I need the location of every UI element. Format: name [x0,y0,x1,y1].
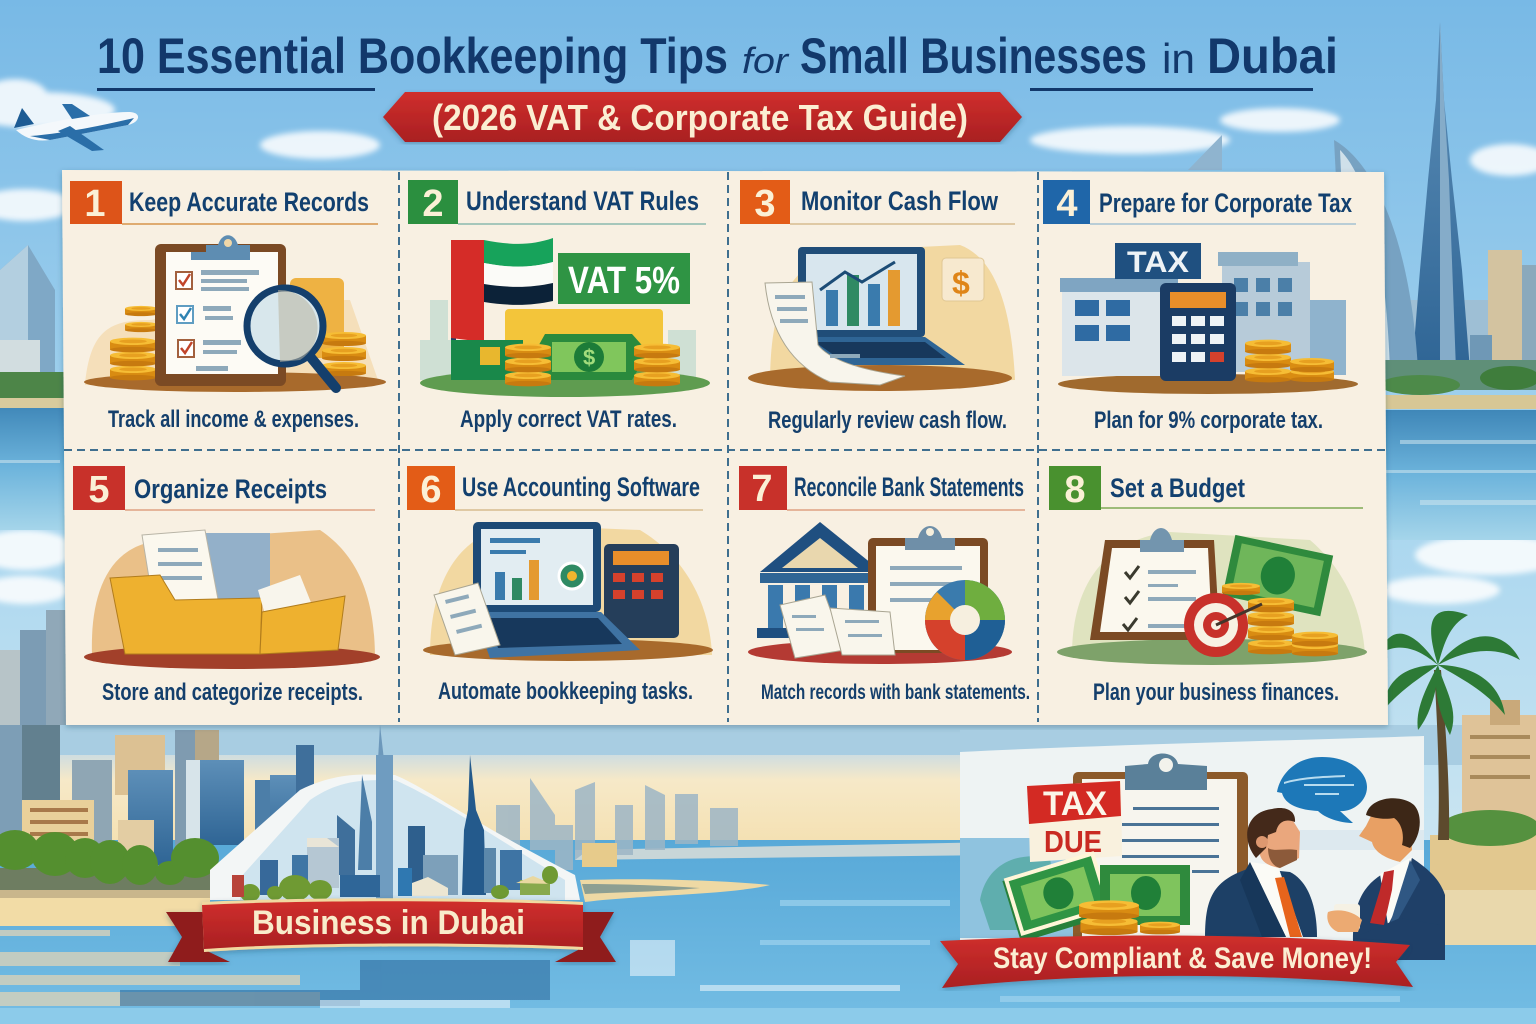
bottom sky and water [0,725,1536,1024]
title [97,28,1338,91]
tip 6 caption: Automate bookkeeping tasks. [438,678,693,705]
tip 7 number badge: 7 [751,468,773,510]
icon: tax buildings and calculator [1058,243,1358,394]
airplane [14,104,138,151]
title: Dubai [1207,28,1338,84]
coins [1079,900,1180,935]
icon: laptop with chart and receipts: $ [952,265,970,301]
tip 2 heading: Understand VAT Rules [466,186,699,216]
man left [1205,808,1317,937]
tip 1 caption: Track all income & expenses. [108,406,359,433]
money [1002,851,1190,942]
tip 6 number badge: 6 [420,469,442,511]
background: side water [0,405,1536,540]
tax due sign [1027,781,1122,862]
tip 8: set a budget [1049,466,1367,706]
skyline: faded distant towers [496,778,738,870]
ribbon: Business in Dubai [166,898,616,962]
icon: clipboard with magnifier and coins [84,235,386,392]
tip 4 number badge: 4 [1056,183,1078,225]
tip 7: reconcile bank statements [739,466,1030,704]
icon: bank, clipboard, pie chart [748,522,1012,664]
tip 2 caption: Apply correct VAT rates. [460,406,677,433]
tip 8 number badge [1049,466,1101,511]
tip 2 number badge: 2 [422,183,444,225]
right scenery: beach towers [1424,700,1536,825]
tip 3 caption: Regularly review cash flow. [768,407,1007,434]
icon: tax buildings and calculator: TAX [1127,246,1189,279]
subtitle ribbon: (2026 VAT & Corporate Tax Guide) [432,97,968,138]
tip 7 heading: Reconcile Bank Statements [794,472,1024,502]
icon: laptop, calculator, documents [423,522,713,661]
ribbon: stay compliant [940,935,1413,988]
tip 6: use accounting software [407,466,713,705]
icon: clipboard, target and cash [1057,528,1367,665]
title: 10 Essential Bookkeeping Tips [97,28,728,84]
title: for [742,40,790,81]
tip 2 number badge [408,180,458,225]
tip 6 number badge [407,466,455,511]
title: in [1162,35,1195,82]
tip 8 number badge: 8 [1064,469,1086,511]
tip 5 heading: Organize Receipts [134,474,327,504]
tip 4: prepare for corporate tax [1043,180,1358,434]
skyline: upper left [0,245,65,408]
icon: UAE flag, VAT badge and cash: VAT 5% [568,260,680,302]
skyline: mid left [0,610,66,830]
illustration: Dubai skyline dome [210,725,580,902]
icon: UAE flag, VAT badge and cash: $ [583,345,595,370]
icon: UAE flag, VAT badge and cash [420,238,710,397]
building: sand coloured low block [582,843,617,867]
tip 3: monitor cash flow [740,180,1015,434]
tip 5: organize receipts [73,466,380,706]
tip 7 caption: Match records with bank statements. [761,681,1030,704]
tip 3 number badge: 3 [754,183,776,225]
icon: laptop with chart and receipts [748,245,1015,391]
tip 5 number badge [73,466,125,511]
tip 1 number badge: 1 [84,183,106,225]
tip 4 caption: Plan for 9% corporate tax. [1094,407,1323,434]
ribbon: Business in Dubai: Business in Dubai [252,904,525,942]
tip 1 number badge [70,181,122,225]
title: Small Businesses [800,28,1147,84]
tip 7 number badge [739,466,787,510]
tip 3 number badge [740,180,790,225]
palm tree [1378,611,1520,840]
tax due sign: TAX [1043,785,1107,823]
tip 5 number badge: 5 [88,469,110,511]
tip 8 heading: Set a Budget [1110,473,1245,503]
main tips panel [62,170,1388,725]
tip 6 heading: Use Accounting Software [462,472,700,502]
tip 1 heading: Keep Accurate Records [129,187,369,217]
speech bubble [1277,757,1367,823]
tip 1: keep accurate records [70,181,386,433]
background: clouds [0,79,1536,604]
tip 8 caption: Plan your business finances. [1093,679,1339,706]
tip 2: understand VAT rules [408,180,710,433]
tip 4 number badge [1043,180,1090,225]
tip 4 heading: Prepare for Corporate Tax [1099,188,1352,218]
tax due sign: DUE [1044,824,1102,859]
skyline: lower left city [0,725,314,890]
lower right compliance panel [940,730,1445,988]
tip 3 heading: Monitor Cash Flow [801,186,999,216]
clipboard [1073,754,1248,957]
ribbon: stay compliant: Stay Compliant & Save Money! [993,942,1372,975]
icon: folders with receipts [84,530,380,669]
tip 5 caption: Store and categorize receipts. [102,679,363,706]
man right [1327,798,1445,960]
skyline: upper right with Burj Khalifa [1188,22,1536,409]
